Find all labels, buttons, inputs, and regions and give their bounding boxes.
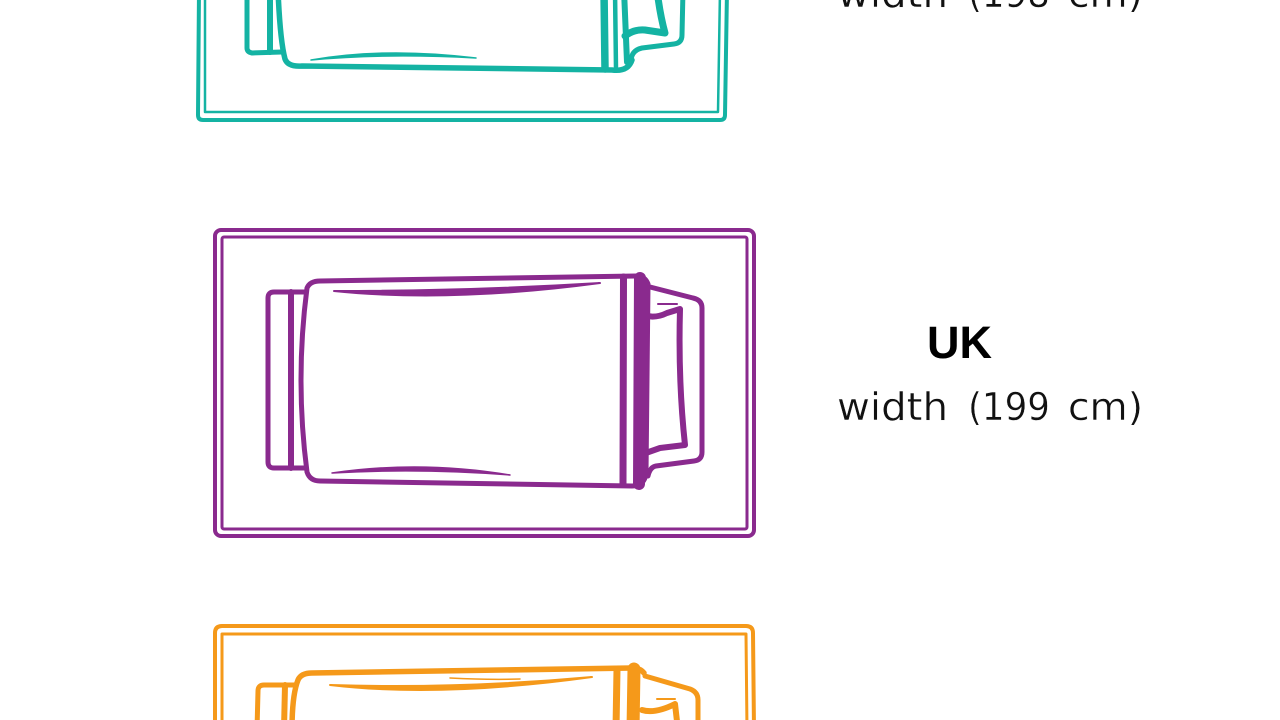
icon: orange bed (cropped at bottom) <box>215 626 754 720</box>
icon: teal bed (cropped at top) <box>198 0 727 120</box>
label: UK width: (199 <box>968 385 1050 429</box>
label: UK width: width <box>837 385 948 429</box>
icon: purple bed (UK) <box>215 230 754 536</box>
label: UK width: cm) <box>1068 385 1143 429</box>
heading: UK: UK <box>927 317 992 368</box>
